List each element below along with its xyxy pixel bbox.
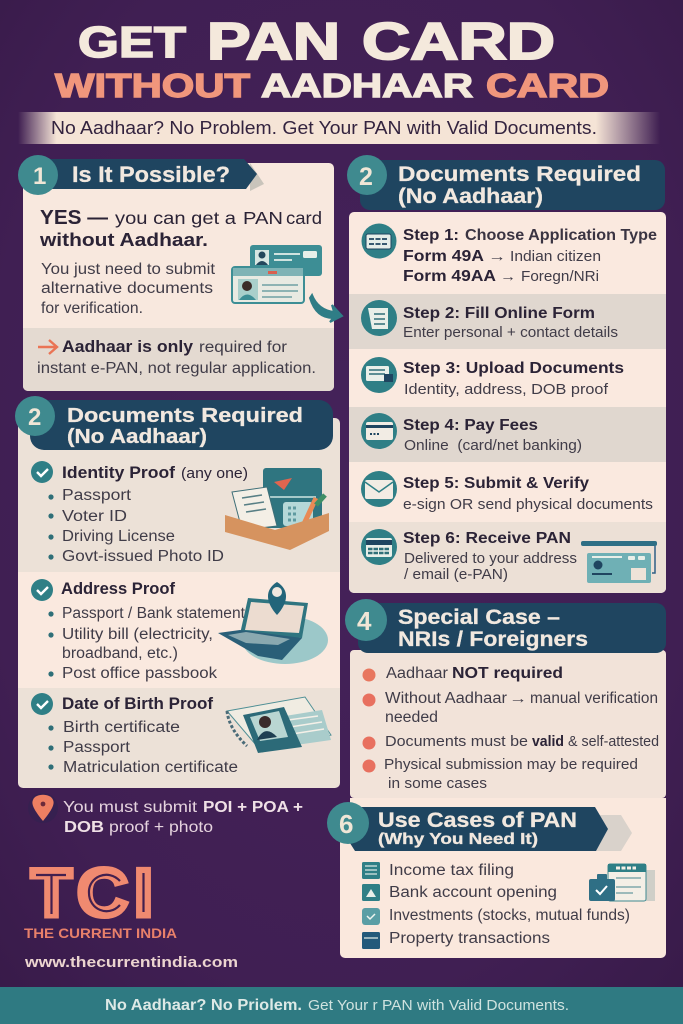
title: CARD [362, 13, 555, 71]
ribbon heading: special case [345, 599, 666, 653]
step 6: Delivered to your address [404, 551, 577, 567]
ribbon heading: documents required [15, 396, 333, 450]
step 6: / email (e-PAN) [404, 567, 508, 583]
panel: use cases and special case background [340, 650, 666, 958]
icon: id cards [232, 245, 322, 303]
ribbon heading: is it possible: 1 [33, 163, 46, 190]
step 1: Indian citizen [510, 249, 601, 265]
icon: pan card delivery [581, 541, 657, 583]
step 1: Form 49AA [403, 268, 496, 285]
ribbon heading: use cases: Use Cases of PAN [378, 809, 577, 832]
step 1: Foregn/NRi [521, 269, 599, 285]
ribbon heading: steps: (No Aadhaar) [398, 185, 543, 208]
identity proof list: Driving License [62, 528, 175, 545]
special case list: Physical submission may be required [384, 756, 638, 773]
step 1: Choose Application Type [465, 227, 657, 244]
aadhaar note: Aadhaar is only [62, 338, 194, 356]
ribbon heading: special case: 4 [357, 606, 372, 636]
step 6: Step 6: Receive PAN [403, 530, 571, 547]
aadhaar note [37, 338, 316, 377]
ribbon heading: use cases: (Why You Need It) [378, 831, 538, 848]
step 4: Online (card/net banking) [404, 438, 582, 454]
explanation text: for verification. [41, 300, 143, 317]
icon: birth certificate id [227, 697, 331, 753]
identity proof list [31, 461, 248, 565]
ribbon heading: documents required: 2 [28, 404, 41, 431]
special case list: needed [385, 709, 438, 726]
callout: must submit: DOB [64, 819, 104, 836]
step 1: → [488, 248, 506, 264]
step 1: Form 49A [403, 248, 484, 265]
ribbon heading: special case: NRIs / Foreigners [398, 628, 588, 651]
title: WITHOUT [55, 67, 250, 104]
logo: TCI: THE CURRENT INDIA [24, 925, 177, 941]
date of birth proof list: Birth certificate [63, 719, 180, 736]
yes statement: PAN [243, 208, 283, 228]
step 1 [362, 224, 657, 285]
special case list: & self-attested [568, 733, 659, 750]
yes statement: YES — [40, 207, 108, 229]
ribbon heading: is it possible [18, 155, 264, 195]
icon: laptop with map pin [218, 582, 328, 664]
panel: is it possible [18, 155, 342, 391]
title: GET [78, 18, 186, 67]
step 4 [361, 413, 582, 454]
identity proof list: Govt-issued Photo ID [62, 548, 224, 565]
aadhaar note: instant e-PAN, not regular application. [37, 360, 316, 377]
special case list: manual verification [530, 690, 658, 707]
ribbon heading: steps: 2 [359, 163, 373, 191]
icon: tax document clipboard [589, 864, 655, 901]
identity proof list: Identity Proof [62, 464, 176, 482]
icon: document box [225, 468, 329, 550]
arrow: to steps [310, 295, 342, 322]
ribbon heading: special case: Special Case – [398, 606, 560, 629]
step 6 [361, 529, 577, 583]
date of birth proof list: Date of Birth Proof [62, 695, 214, 713]
ribbon heading: is it possible: Is It Possible? [72, 162, 230, 187]
address proof list: Post office passbook [62, 665, 217, 682]
website url: www.thecurrentindia.com [24, 954, 238, 971]
address proof list [31, 579, 246, 682]
title [55, 13, 609, 104]
ribbon heading: steps: Documents Required [398, 163, 641, 186]
explanation text: alternative documents [41, 280, 213, 297]
step 5: Step 5: Submit & Verify [403, 475, 589, 492]
step 5: e-sign OR send physical documents [403, 497, 653, 513]
footer banner [0, 987, 683, 1024]
ribbon heading: use cases: 6 [339, 809, 353, 839]
aadhaar note: required for [199, 339, 287, 356]
callout: must submit: POI + POA + [203, 799, 303, 816]
step 2: Enter personal + contact details [403, 325, 618, 341]
step 3 [361, 357, 624, 398]
identity proof list: (any one) [181, 465, 248, 482]
ribbon heading: documents required: (No Aadhaar) [67, 426, 207, 448]
logo: TCI: T [31, 855, 72, 931]
address proof list: broadband, etc.) [62, 645, 178, 662]
logo: TCI [24, 855, 177, 941]
ribbon heading: steps [347, 155, 665, 210]
yes statement: without Aadhaar. [39, 230, 208, 250]
callout: must submit [28, 793, 303, 836]
ribbon heading: use cases [327, 802, 632, 851]
panel: application steps [347, 155, 666, 593]
callout: must submit: You must submit [63, 799, 198, 816]
step 1: Step 1: [403, 227, 459, 244]
yes statement: card [286, 208, 322, 228]
use cases list: Income tax filing [389, 862, 514, 879]
step 5 [361, 471, 653, 513]
explanation text: You just need to submit [41, 261, 216, 278]
step 4: Step 4: Pay Fees [403, 417, 538, 434]
ribbon heading: documents required: Documents Required [67, 405, 303, 427]
address proof list: Address Proof [61, 580, 176, 598]
title: CARD [486, 67, 609, 104]
address proof list: Utility bill (electricity, [62, 626, 213, 643]
title: AADHAAR [261, 67, 473, 104]
explanation text [41, 261, 216, 317]
subtitle banner: No Aadhaar? No Problem. Get Your PAN with Valid Documents. [51, 117, 597, 138]
logo: TCI: I [134, 855, 153, 931]
address proof list: Passport / Bank statement [62, 605, 246, 622]
special case list: NOT required [452, 665, 563, 682]
date of birth proof list: Matriculation certificate [63, 759, 238, 776]
identity proof list: Passport [62, 487, 132, 504]
special case list: Aadhaar [386, 665, 448, 682]
special case list [362, 665, 659, 792]
identity proof list: Voter ID [62, 508, 127, 525]
step 3: Step 3: Upload Documents [403, 360, 624, 377]
special case list: in some cases [388, 775, 487, 792]
callout: must submit: proof + photo [109, 819, 213, 836]
use cases list: Property transactions [389, 930, 550, 947]
yes statement [39, 207, 322, 250]
use cases list: Investments (stocks, mutual funds) [389, 907, 630, 924]
step 1: → [500, 268, 516, 284]
use cases list [362, 862, 630, 949]
footer banner: Get Your r PAN with Valid Documents. [308, 998, 569, 1014]
step 3: Identity, address, DOB proof [404, 382, 609, 398]
special case list: Documents must be [385, 733, 528, 750]
use cases list: Bank account opening [389, 884, 557, 901]
yes statement: you can get a [115, 208, 236, 228]
step 2 [361, 300, 618, 341]
footer banner: No Aadhaar? No Priolem. [105, 997, 302, 1014]
panel: documents required left [15, 396, 340, 788]
date of birth proof list [31, 693, 238, 776]
special case list: valid [532, 733, 564, 750]
special case list: → [509, 690, 527, 706]
subtitle banner [18, 112, 660, 144]
special case list: Without Aadhaar [385, 690, 507, 707]
date of birth proof list: Passport [63, 739, 131, 756]
title: PAN [207, 13, 340, 71]
logo: TCI: C [77, 855, 128, 931]
step 2: Step 2: Fill Online Form [403, 305, 595, 322]
